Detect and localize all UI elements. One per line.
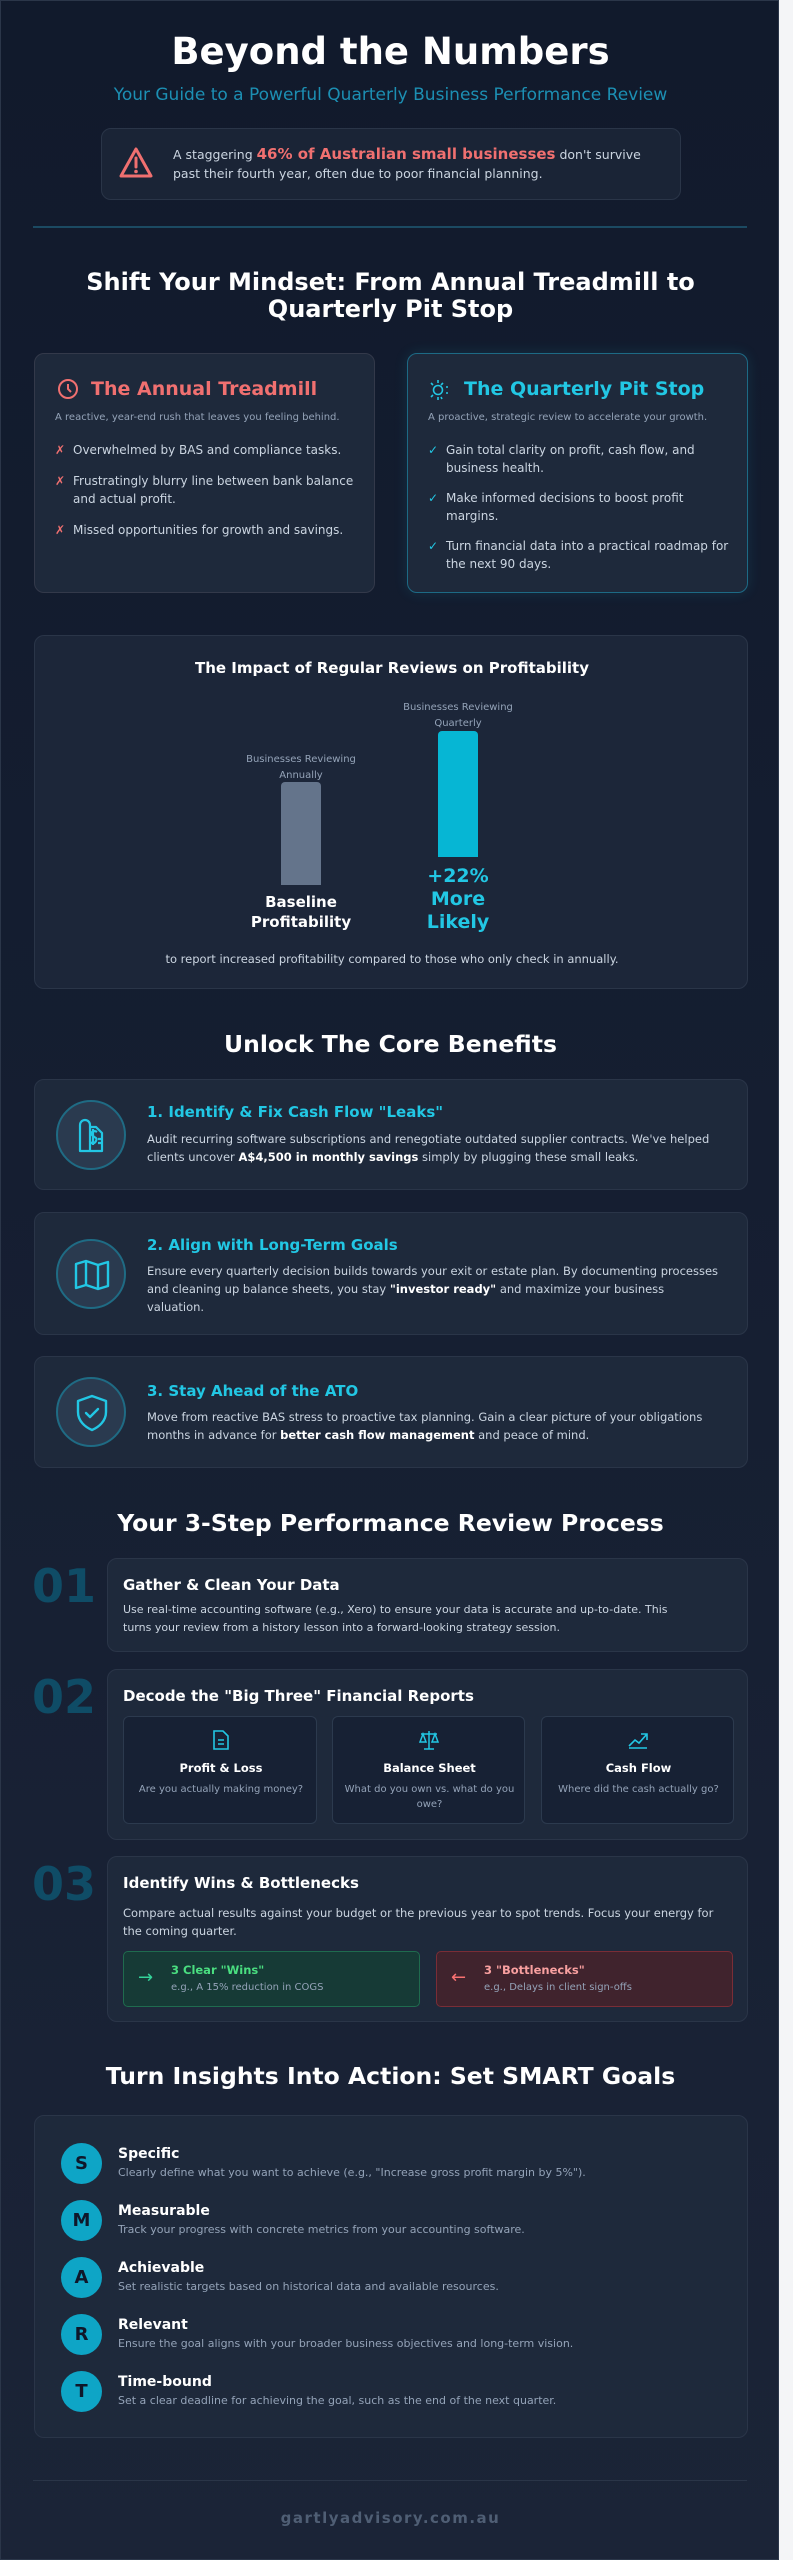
heading: shift your mindset: Quarterly Pit Stop (268, 295, 513, 323)
label: +22% (427, 865, 489, 933)
benefit text: clients uncover A$4,500 in monthly savings simply by plugging these small leaks. (147, 1150, 638, 1164)
list: benefits: ✓ (428, 539, 438, 553)
benefit text: months in advance for better cash flow management and peace of mind. (147, 1428, 589, 1442)
heading: smart goals: Turn Insights Into Action: Set SMART Goals (106, 2062, 675, 2090)
callout: wins: → (138, 1967, 153, 1988)
goal M: M (73, 2210, 90, 2231)
report: cash flow: Where did the cash actually go? (558, 1784, 719, 1795)
benefit 3 (34, 1356, 748, 1468)
report: cash flow: Cash Flow (606, 1761, 671, 1775)
label: baseline: Profitability (251, 913, 351, 931)
step 1 (107, 1558, 748, 1652)
callout: wins: 3 Clear "Wins" (171, 1963, 264, 1977)
benefit 1 (34, 1079, 748, 1190)
goal T (61, 2371, 556, 2412)
icon: document (213, 1730, 229, 1750)
footer: website: gartlyadvisory.com.au (281, 2509, 500, 2527)
step text: the coming quarter. (123, 1924, 237, 1938)
goal M: Measurable (118, 2203, 210, 2219)
benefit text: Ensure every quarterly decision builds towards your exit or estate plan. By documenting processes (147, 1264, 718, 1278)
label: +22%: More (431, 888, 485, 910)
list: pain points: Frustratingly blurry line between bank balance and actual profit. (73, 474, 353, 506)
benefit title: 2. Align with Long-Term Goals (147, 1236, 398, 1254)
list: pain points: Overwhelmed by BAS and compliance tasks. (73, 443, 341, 457)
callout: bottlenecks (436, 1951, 733, 2007)
label: baseline: Baseline (265, 893, 337, 911)
step text: turns your review from a history lesson into a forward-looking strategy session. (123, 1621, 560, 1634)
list: benefits: Gain total clarity on profit, cash flow, and business health. (446, 443, 695, 475)
report: profit & loss (123, 1716, 317, 1824)
benefit text: valuation. (147, 1300, 204, 1314)
goal R: Ensure the goal aligns with your broader business objectives and long-term vision. (118, 2337, 573, 2350)
list: benefits (428, 443, 728, 571)
goal T: Time-bound (118, 2374, 212, 2390)
heading: core benefits: Unlock The Core Benefits (224, 1030, 557, 1058)
heading: shift your mindset (86, 268, 695, 323)
bar chart (246, 702, 513, 933)
list: pain points: ✗ (55, 474, 65, 488)
card title: The Annual Treadmill (91, 378, 317, 400)
panel: annual treadmill (34, 353, 375, 593)
subtitle: Your Guide to a Powerful Quarterly Business Performance Review (114, 85, 667, 105)
label: +22%: +22% (427, 865, 489, 887)
card subtitle: A proactive, strategic review to accelerate your growth. (428, 412, 707, 423)
bar: quarterly (438, 731, 478, 857)
card subtitle: A reactive, year-end rush that leaves you feeling behind. (55, 412, 340, 423)
goal M (61, 2200, 525, 2241)
goal A (61, 2257, 499, 2298)
goal A: Set realistic targets based on historical data and available resources. (118, 2280, 499, 2293)
callout: statistic alert (101, 128, 681, 200)
bar: annual (281, 782, 321, 885)
title: Beyond the Numbers (171, 30, 610, 73)
callout: wins: e.g., A 15% reduction in COGS (171, 1982, 323, 1993)
chart title: The Impact of Regular Reviews on Profitability (195, 659, 589, 677)
benefit text: Move from reactive BAS stress to proactive tax planning. Gain a clear picture of your obligations (147, 1410, 702, 1424)
step title: Decode the "Big Three" Financial Reports (123, 1687, 474, 1705)
icon: trend (628, 1733, 648, 1749)
step text (123, 1906, 714, 1938)
goal T: T (75, 2381, 88, 2402)
label: +22%: Likely (427, 911, 489, 933)
benefit title: 3. Stay Ahead of the ATO (147, 1382, 358, 1400)
panel: profitability chart (34, 635, 748, 989)
label: baseline (251, 893, 351, 931)
step number 02: 02 (32, 1670, 96, 1724)
list: pain points (55, 443, 353, 537)
step title: Identify Wins & Bottlenecks (123, 1874, 359, 1892)
icon: clock (58, 379, 78, 399)
list: benefits: Turn financial data into a practical roadmap for the next 90 days. (446, 539, 728, 571)
bar label: quarterly: Quarterly (434, 718, 482, 729)
benefit text: Audit recurring software subscriptions and renegotiate outdated supplier contracts. We've helped (147, 1132, 709, 1146)
report: balance sheet: What do you own vs. what do you owe? (345, 1784, 514, 1810)
step 3 (107, 1856, 748, 2022)
icon: cash leak (56, 1100, 126, 1170)
benefit text (147, 1132, 709, 1164)
heading: shift your mindset: Shift Your Mindset: From Annual Treadmill to (86, 268, 695, 296)
bar label: annually (246, 754, 356, 781)
list: pain points: ✗ (55, 443, 65, 457)
callout: bottlenecks: e.g., Delays in client sign-offs (484, 1982, 632, 1993)
chart caption: to report increased profitability compared to those who only check in annually. (165, 952, 619, 966)
report: profit & loss: Profit & Loss (180, 1761, 262, 1775)
goal R: R (75, 2324, 88, 2345)
list: pain points: Missed opportunities for growth and savings. (73, 523, 343, 537)
bar label: quarterly: Businesses Reviewing (403, 702, 513, 713)
callout: bottlenecks: ← (451, 1967, 466, 1988)
goal S: Clearly define what you want to achieve (e.g., "Increase gross profit margin by 5%"). (118, 2166, 586, 2179)
icon: scales (419, 1731, 439, 1750)
goal A: A (75, 2267, 88, 2288)
alert text: A staggering 46% of Australian small businesses don't survive past their fourth year, often due to poor financial planning. (173, 145, 641, 181)
goal M: Track your progress with concrete metrics from your accounting software. (118, 2223, 525, 2236)
benefit 2 (34, 1212, 748, 1335)
step number 03: 03 (32, 1857, 96, 1911)
goal A: Achievable (118, 2260, 204, 2276)
callout: wins (123, 1951, 420, 2007)
goal T: Set a clear deadline for achieving the goal, such as the end of the next quarter. (118, 2394, 556, 2407)
report: profit & loss: Are you actually making money? (139, 1784, 303, 1795)
bar label: quarterly (403, 702, 513, 729)
bar label: annually: Annually (279, 770, 323, 781)
list: benefits: ✓ (428, 491, 438, 505)
goal R (61, 2314, 573, 2355)
step number 01: 01 (32, 1559, 96, 1613)
bar label: annually: Businesses Reviewing (246, 754, 356, 765)
heading: 3-step process: Your 3-Step Performance Review Process (117, 1509, 664, 1537)
icon: map (56, 1239, 126, 1309)
goal S: Specific (118, 2146, 179, 2162)
panel: quarterly pit stop (407, 353, 748, 593)
step 2 (107, 1669, 748, 1840)
panel: SMART goals (34, 2115, 748, 2438)
benefit text: and cleaning up balance sheets, you stay "investor ready" and maximize your business (147, 1282, 664, 1296)
goal R: Relevant (118, 2317, 188, 2333)
benefit text (147, 1264, 718, 1314)
benefit text (147, 1410, 702, 1442)
report: balance sheet (332, 1716, 525, 1824)
report: balance sheet: Balance Sheet (383, 1761, 476, 1775)
icon: shield (56, 1377, 126, 1447)
report: cash flow (541, 1716, 734, 1824)
callout: bottlenecks: 3 "Bottlenecks" (484, 1963, 585, 1977)
step text: Compare actual results against your budget or the previous year to spot trends. Focus your energy for (123, 1906, 713, 1920)
step title: Gather & Clean Your Data (123, 1576, 340, 1594)
benefit title: 1. Identify & Fix Cash Flow "Leaks" (147, 1103, 443, 1121)
card title: The Quarterly Pit Stop (464, 378, 704, 400)
list: benefits: ✓ (428, 443, 438, 457)
icon: warning triangle (120, 147, 153, 178)
list: benefits: Make informed decisions to boost profit margins. (446, 491, 684, 523)
icon: gear sparkle (430, 380, 448, 400)
goal S: S (75, 2153, 88, 2174)
step text (123, 1603, 667, 1634)
list: pain points: ✗ (55, 523, 65, 537)
step text: Use real-time accounting software (e.g., Xero) to ensure your data is accurate and up-to-date. This (123, 1603, 667, 1616)
goal S (61, 2143, 586, 2184)
